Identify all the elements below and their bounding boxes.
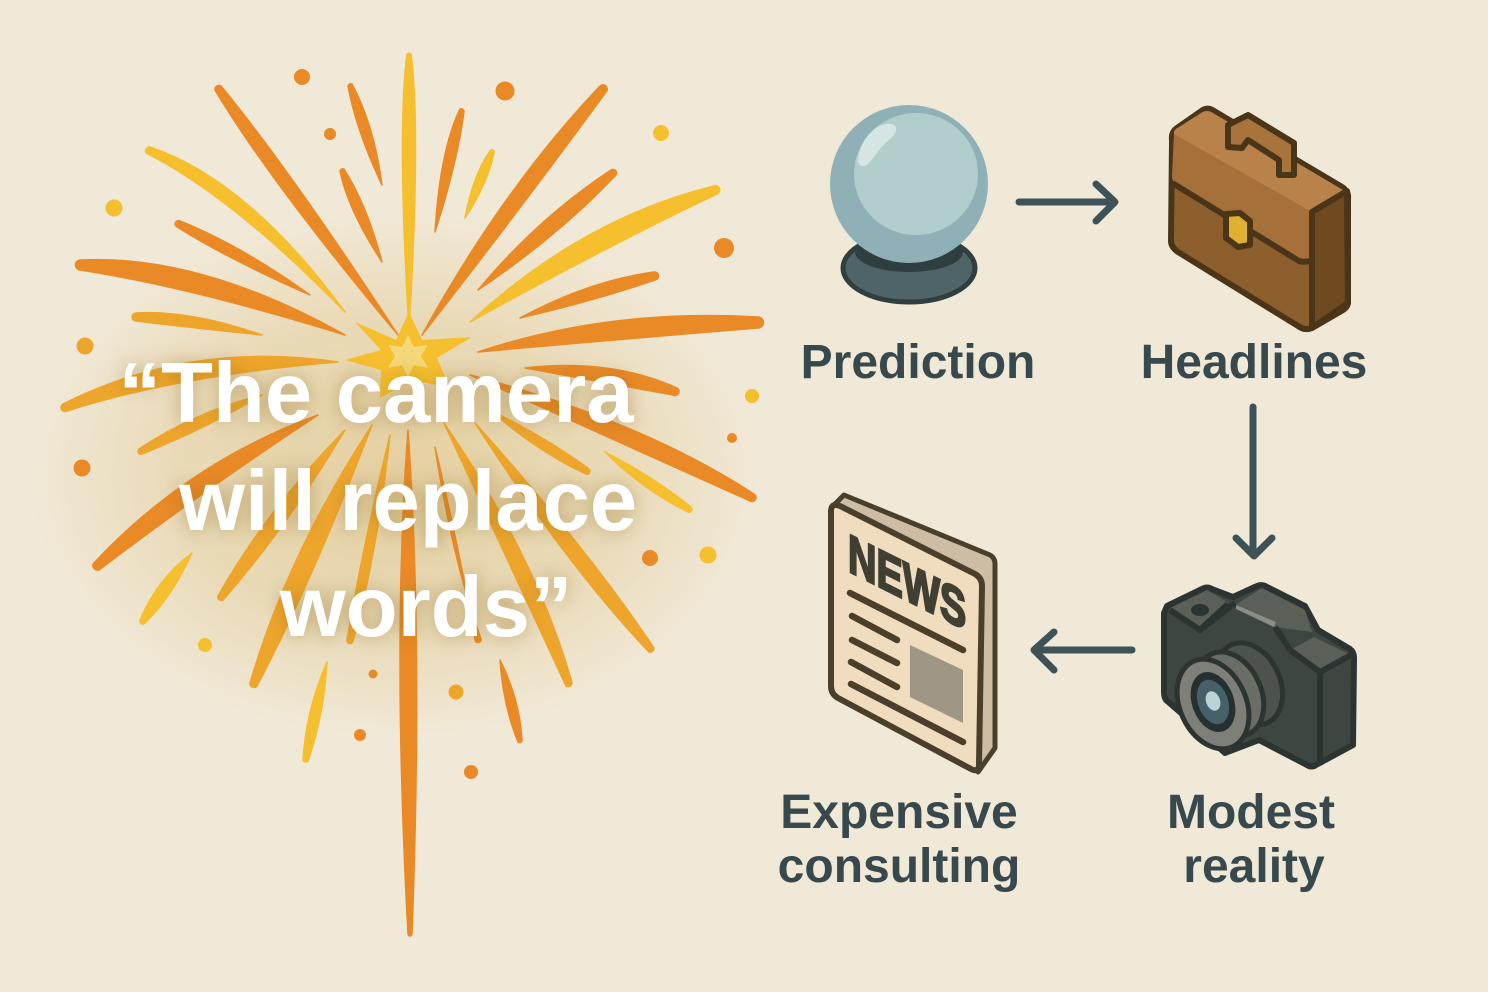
- quote headline: “The camera: [119, 346, 634, 441]
- arrow: modest reality to expensive consulting: [1034, 632, 1132, 670]
- icon: briefcase: [1171, 109, 1348, 329]
- quote headline: words”: [279, 560, 572, 655]
- icon: camera: [1163, 585, 1354, 766]
- arrow: prediction to headlines: [1019, 184, 1115, 221]
- quote headline: [119, 346, 637, 655]
- newspaper photo block: [910, 645, 963, 723]
- label: expensive consulting: Expensive: [780, 786, 1018, 839]
- firework burst: [61, 53, 764, 936]
- label: modest reality: [1167, 786, 1335, 893]
- sparks: [74, 69, 759, 779]
- icon: newspaper: [831, 495, 995, 772]
- newspaper text lines: [850, 593, 963, 742]
- glow behind quote: [25, 210, 765, 740]
- lower rays: [93, 375, 756, 936]
- label: expensive consulting: [778, 786, 1020, 893]
- label: headlines: Headlines: [1141, 336, 1367, 389]
- label: expensive consulting: consulting: [778, 840, 1020, 893]
- icon: crystal ball: [830, 105, 988, 302]
- label: prediction: Prediction: [801, 336, 1035, 389]
- upper rays: [61, 53, 764, 412]
- label: modest reality: Modest: [1167, 786, 1335, 839]
- arrow: headlines to modest reality: [1236, 407, 1272, 556]
- newspaper masthead: NEWS: [848, 523, 966, 642]
- label: modest reality: reality: [1183, 840, 1325, 893]
- central star: [345, 312, 472, 398]
- quote headline: will replace: [178, 454, 637, 549]
